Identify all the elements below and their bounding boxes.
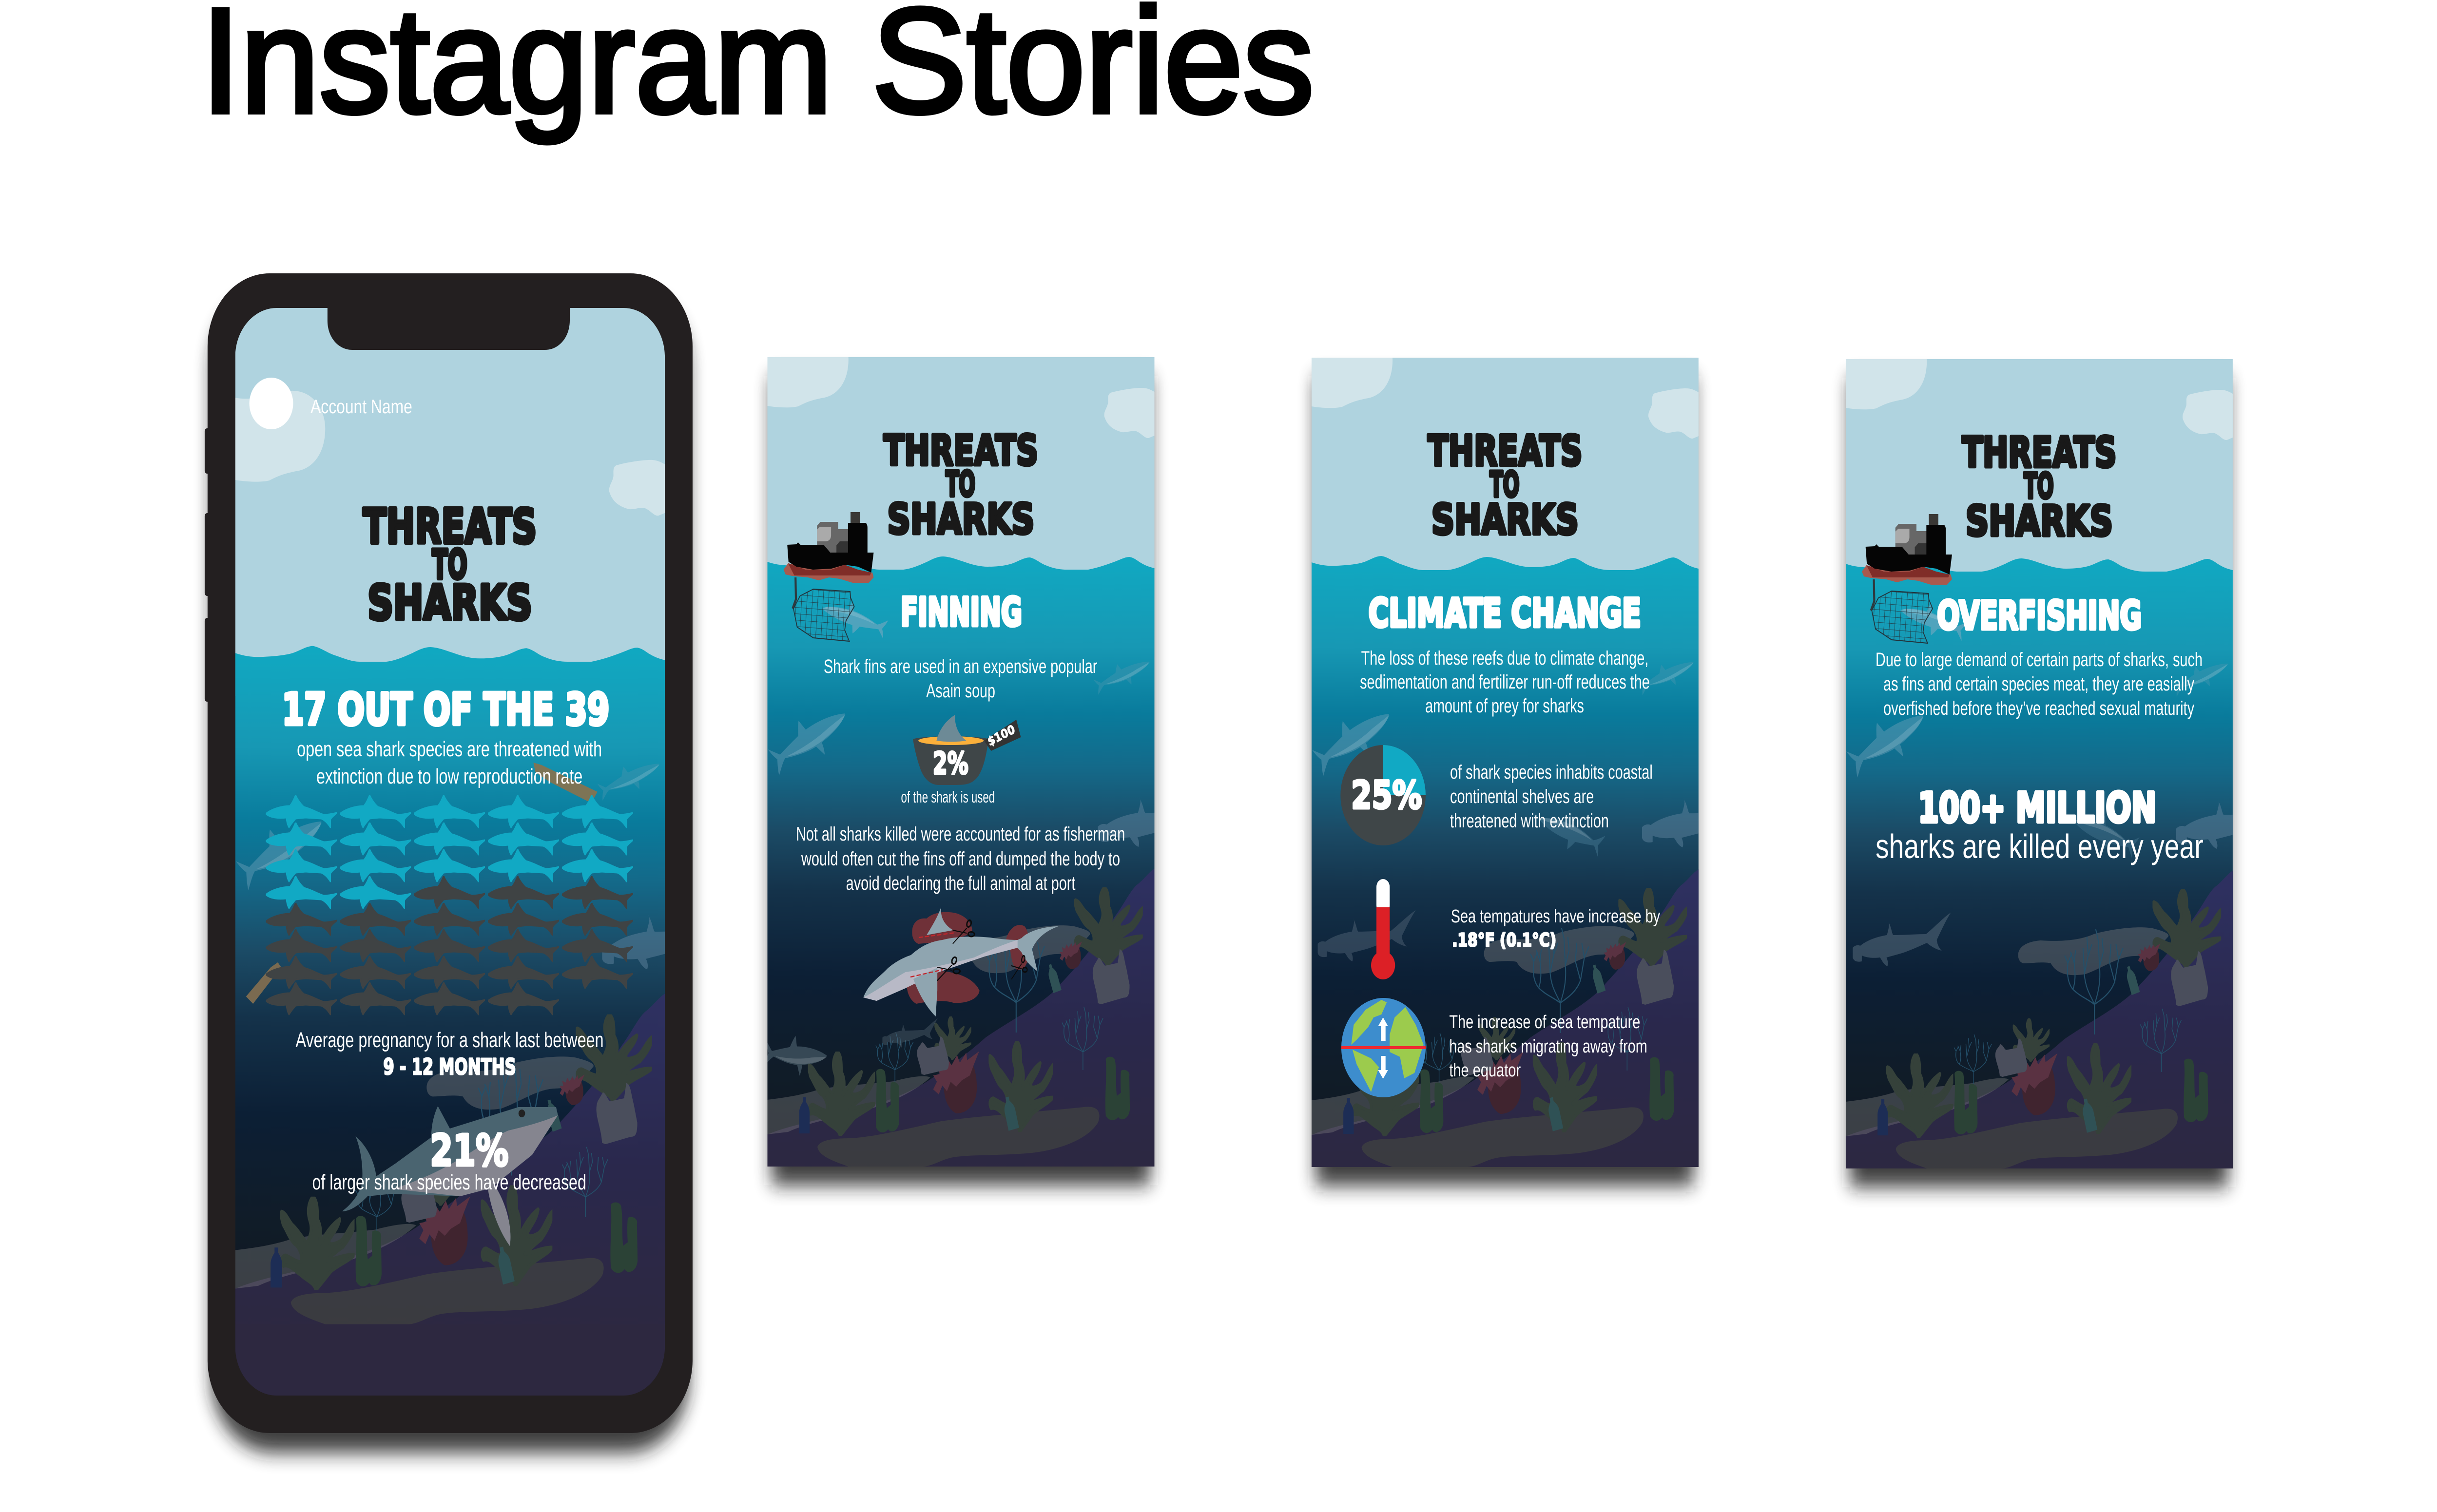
text: fins soup: Shark fins are used in an expensive popular bbox=[824, 655, 1097, 677]
price label: $100 bbox=[986, 722, 1017, 749]
panel: phone mockup bbox=[205, 210, 730, 1453]
text: migrating: has sharks migrating away from bbox=[1449, 1036, 1647, 1057]
big shark bbox=[342, 1106, 558, 1246]
icon: thermometer bbox=[1371, 879, 1395, 979]
phone screen bbox=[235, 308, 665, 1396]
price tag bbox=[984, 720, 1021, 751]
text: coastal shelves: threatened with extinction bbox=[1450, 809, 1609, 832]
icon: plastic bottle lower left bbox=[246, 962, 281, 1004]
chart: 25% pie: 25% bbox=[1351, 774, 1422, 818]
text: of the shark is used: of the shark is used bbox=[901, 788, 995, 806]
heading bbox=[1428, 426, 1583, 544]
phone heading bbox=[363, 500, 537, 631]
text: demand: as fins and certain species meat, they are easially bbox=[1883, 672, 2194, 695]
text: sea temperatures: Sea tempatures have increase by bbox=[1451, 906, 1660, 927]
icon: fishing ship and net bbox=[784, 512, 890, 646]
text: demand: overfished before they’ve reached sexual maturity bbox=[1883, 697, 2194, 719]
text: migrating: the equator bbox=[1449, 1060, 1521, 1081]
section heading: finning: FINNING bbox=[901, 590, 1022, 635]
icon: plastic bottle drifting bbox=[533, 763, 598, 803]
icon: soup bowl with fin bbox=[913, 715, 1021, 785]
text: coastal shelves: of shark species inhabits coastal bbox=[1450, 761, 1653, 783]
stat: temperature rise: .18°F (0.1°C) bbox=[1452, 930, 1556, 951]
text: migrating bbox=[1449, 1012, 1647, 1081]
text: loss of reefs: amount of prey for sharks bbox=[1425, 694, 1584, 717]
text: loss of reefs bbox=[1360, 647, 1650, 717]
text: fins soup: Asain soup bbox=[926, 679, 995, 702]
icon: fishing ship and net bbox=[1862, 514, 1968, 648]
text: coastal shelves: continental shelves are bbox=[1450, 785, 1594, 807]
text: not all sharks: Not all sharks killed were accounted for as fisherman bbox=[796, 823, 1125, 845]
text: loss of reefs: The loss of these reefs due to climate change, bbox=[1361, 647, 1648, 669]
heading bbox=[1962, 428, 2117, 545]
illustration: finned shark bbox=[863, 907, 1059, 1016]
heading bbox=[884, 426, 1038, 543]
text: fins soup bbox=[824, 655, 1097, 702]
text: not all sharks: avoid declaring the full animal at port bbox=[846, 872, 1076, 894]
text: pregnancy: Average pregnancy for a shark last between bbox=[296, 1028, 604, 1052]
text: not all sharks: would often cut the fins off and dumped the body to bbox=[801, 847, 1120, 870]
icon: globe with equator bbox=[1341, 998, 1426, 1097]
text: open sea species: extinction due to low reproduction rate bbox=[316, 764, 582, 788]
text: coastal shelves bbox=[1450, 761, 1653, 832]
stat: 21%: 21% bbox=[430, 1126, 508, 1176]
icon: profile circle bbox=[250, 378, 293, 429]
chart: 25% pie bbox=[1340, 745, 1426, 845]
text: not all sharks bbox=[796, 823, 1125, 894]
section heading: climate change: CLIMATE CHANGE bbox=[1369, 591, 1641, 636]
account name: Account Name bbox=[310, 395, 412, 418]
stat: 100+ million: 100+ MILLION bbox=[1918, 784, 2156, 832]
phone heading: TO bbox=[432, 541, 467, 588]
stat: 2%: 2% bbox=[933, 746, 968, 781]
text: demand bbox=[1876, 648, 2203, 719]
text: migrating: The increase of sea tempature bbox=[1449, 1012, 1640, 1033]
text: larger sharks: of larger shark species have decreased bbox=[312, 1170, 586, 1194]
text: killed every year: sharks are killed every year bbox=[1876, 827, 2204, 865]
phone heading: SHARKS bbox=[367, 575, 532, 631]
panel: climate change bbox=[1308, 163, 1757, 1186]
stat: 9-12 months: 9 - 12 MONTHS bbox=[383, 1054, 516, 1080]
text: loss of reefs: sedimentation and fertilizer run-off reduces the bbox=[1360, 670, 1650, 693]
panel: overfishing bbox=[1842, 164, 2291, 1187]
chart: 17 of 39 shark pictogram bbox=[266, 795, 633, 1014]
text: demand: Due to large demand of certain parts of sharks, such bbox=[1876, 648, 2203, 670]
panel: finning bbox=[763, 162, 1213, 1186]
stat: 17 out of the 39: 17 OUT OF THE 39 bbox=[282, 684, 609, 735]
phone body bbox=[208, 273, 693, 1433]
text: open sea species bbox=[297, 737, 602, 788]
section heading: overfishing: OVERFISHING bbox=[1937, 593, 2142, 638]
icon: phone side buttons bbox=[205, 428, 213, 702]
phone heading: THREATS bbox=[363, 500, 537, 555]
text: open sea species: open sea shark species are threatened with bbox=[297, 737, 602, 761]
